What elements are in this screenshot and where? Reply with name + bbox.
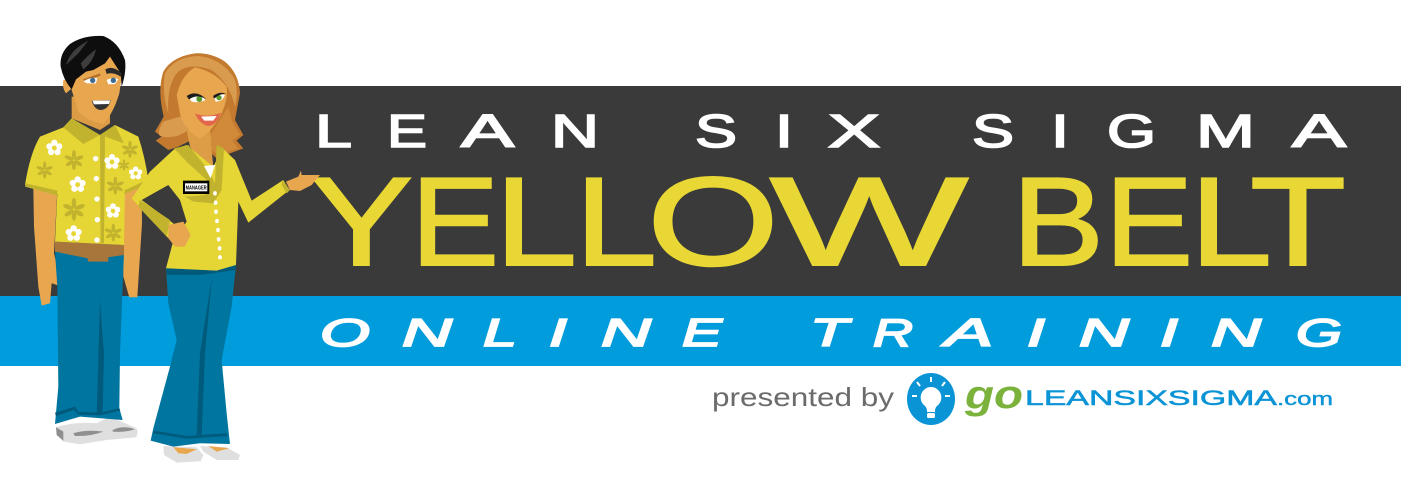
woman name badge [183,181,209,194]
heading: YELLOW BELT: L [1190,151,1272,292]
heading: ONLINE TRAINING: N [402,312,453,355]
woman [132,53,320,463]
heading: ONLINE TRAINING: N [601,312,652,355]
heading: ONLINE TRAINING: I [1160,312,1178,355]
logo wordmark: LEANSIXSIGMA [1025,387,1277,410]
heading: ONLINE TRAINING: I [549,312,567,355]
logo wordmark: go [964,373,1023,417]
man shoes [56,417,138,444]
heading: YELLOW BELT: B [1012,151,1104,292]
heading: YELLOW BELT: L [495,151,577,292]
man belt [55,242,124,262]
dark banner [0,86,1401,296]
woman buttons [215,193,220,258]
man jeans [55,252,124,424]
woman mouth [195,113,221,126]
heading: LEAN SIX SIGMA: A [1292,105,1347,157]
man hair [61,36,125,89]
heading: LEAN SIX SIGMA: L [315,105,352,157]
woman jacket [132,145,289,271]
woman neck [187,127,213,167]
woman face [177,67,227,138]
heading: ONLINE TRAINING: O [320,312,370,355]
heading: LEAN SIX SIGMA: E [387,105,427,157]
woman head [155,53,243,167]
heading: ONLINE TRAINING: L [483,312,517,355]
man head [61,36,125,124]
heading: YELLOW BELT: E [1105,151,1193,292]
heading: YELLOW BELT: E [411,151,499,292]
heading: YELLOW BELT: L [575,151,657,292]
heading: ONLINE TRAINING: R [873,312,913,355]
heading: LEAN SIX SIGMA: S [695,105,737,157]
heading: ONLINE TRAINING: A [941,312,993,355]
woman hair [155,53,243,160]
heading: LEAN SIX SIGMA: I [775,105,793,157]
characters [25,36,320,463]
heading: LEAN SIX SIGMA: M [1196,105,1255,157]
man ear and face [63,53,123,124]
logo wordmark: .com [1277,389,1333,409]
heading: YELLOW BELT: Y [310,151,413,292]
woman hand [168,171,320,247]
heading: ONLINE TRAINING: T [810,312,853,355]
heading: LEAN SIX SIGMA: I [1051,105,1069,157]
man shirt [25,118,148,245]
heading: LEAN SIX SIGMA: S [972,105,1014,157]
heading: LEAN SIX SIGMA: N [551,105,599,157]
heading: ONLINE TRAINING: G [1296,312,1342,355]
heading: LEAN SIX SIGMA: G [1107,105,1156,157]
man arms [33,183,142,306]
icon: light bulb logo [907,373,955,425]
man [25,36,148,444]
heading: YELLOW BELT: W [770,151,968,292]
heading: YELLOW BELT: T [1250,151,1346,292]
woman shoes [163,446,240,463]
presented by label: presented by [712,382,894,412]
man eyes [83,78,118,84]
blue banner [0,296,1401,366]
woman eyes [188,94,225,102]
heading: YELLOW BELT: O [647,151,779,292]
heading: ONLINE TRAINING: N [1079,312,1130,355]
man mouth [92,100,111,110]
woman name badge: MANAGER [186,185,207,191]
heading: LEAN SIX SIGMA: X [828,105,880,157]
logo wordmark [964,373,1333,417]
heading: ONLINE TRAINING: I [1027,312,1045,355]
man neck [72,97,110,130]
heading: ONLINE TRAINING: N [1211,312,1262,355]
heading: ONLINE TRAINING: E [682,312,724,355]
woman jeans [151,265,236,447]
heading: LEAN SIX SIGMA: A [461,105,515,157]
man eyebrows [105,68,122,77]
